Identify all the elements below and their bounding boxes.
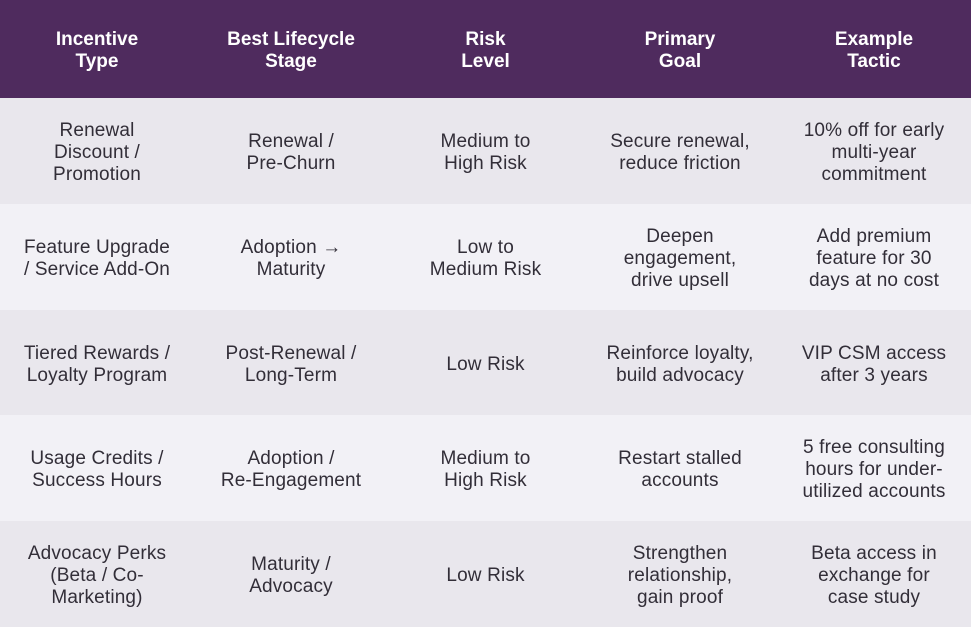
example tactic: Add premium <box>817 226 931 247</box>
lifecycle stage <box>246 131 336 174</box>
row: Renewal Discount <box>0 98 971 204</box>
primary goal: Deepen <box>646 226 714 247</box>
risk level: Low Risk <box>446 565 525 586</box>
example tactic: hours for under- <box>805 459 943 480</box>
incentive type: Loyalty Program <box>27 364 167 386</box>
incentive type: Feature Upgrade <box>24 237 170 258</box>
risk level <box>440 448 531 491</box>
incentive type <box>24 342 170 386</box>
example tactic <box>804 120 944 185</box>
risk level: Medium to <box>440 131 531 152</box>
primary goal: accounts <box>641 470 719 491</box>
primary goal <box>628 543 732 608</box>
lifecycle stage: Pre-Churn <box>246 153 336 174</box>
example tactic: utilized accounts <box>802 481 946 502</box>
primary goal: Reinforce loyalty, <box>606 342 754 364</box>
primary goal: build advocacy <box>616 364 744 386</box>
row: Advocacy Perks <box>0 521 971 627</box>
lifecycle stage <box>249 554 333 597</box>
risk level: High Risk <box>444 470 527 491</box>
column heading: Incentive Type: Type <box>76 51 118 72</box>
incentive type: Tiered Rewards / <box>24 342 170 364</box>
lifecycle stage <box>221 448 361 491</box>
example tactic: Beta access in <box>811 543 937 564</box>
example tactic <box>809 226 939 291</box>
lifecycle stage: Adoption / <box>247 448 335 469</box>
lifecycle stage: Maturity <box>257 259 325 280</box>
lifecycle stage: Renewal / <box>248 131 334 152</box>
incentive type: Success Hours <box>32 470 162 491</box>
risk level <box>430 237 542 280</box>
risk level: Low Risk <box>446 354 525 374</box>
header row <box>0 0 971 98</box>
lifecycle stage: Post-Renewal / <box>226 342 356 364</box>
column heading: Example Tactic: Tactic <box>847 51 901 72</box>
lifecycle stage: Advocacy <box>249 576 333 597</box>
risk level <box>440 131 531 174</box>
primary goal <box>618 448 742 491</box>
incentive type: Discount / <box>54 142 140 163</box>
primary goal: Secure renewal, <box>610 131 750 152</box>
incentive type: Advocacy Perks <box>28 543 166 564</box>
row: Usage Credits <box>0 415 971 521</box>
risk level: Low to <box>457 237 514 258</box>
example tactic: 5 free consulting <box>803 437 945 458</box>
example tactic: VIP CSM access <box>802 342 946 364</box>
primary goal: Restart stalled <box>618 448 742 469</box>
incentive type <box>53 120 141 185</box>
primary goal: gain proof <box>637 587 723 608</box>
example tactic: days at no cost <box>809 270 939 291</box>
column heading: Example Tactic: Example <box>835 29 913 50</box>
column heading: Primary Goal: Primary <box>645 29 715 50</box>
example tactic: commitment <box>822 164 926 185</box>
column heading: Risk Level <box>461 29 510 72</box>
primary goal: Strengthen <box>633 543 727 564</box>
lifecycle stage <box>240 237 341 280</box>
column heading: Best Lifecycle Stage: Stage <box>265 51 317 72</box>
risk level: High Risk <box>444 153 527 174</box>
lifecycle stage: Re-Engagement <box>221 470 361 491</box>
example tactic: multi-year <box>832 142 916 163</box>
example tactic: exchange for <box>818 565 930 586</box>
primary goal <box>610 131 750 174</box>
incentive type: Promotion <box>53 164 141 185</box>
column heading: Incentive Type <box>56 29 138 72</box>
primary goal: reduce friction <box>619 153 741 174</box>
example tactic <box>802 437 946 502</box>
primary goal: engagement, <box>624 248 736 269</box>
incentive type: / Service Add-On <box>24 259 170 280</box>
incentive type: Usage Credits / <box>30 448 164 469</box>
column heading: Best Lifecycle Stage <box>227 29 355 72</box>
row: Feature Upgrade <box>0 204 971 310</box>
incentive type: Marketing) <box>51 587 143 608</box>
lifecycle stage: Adoption → <box>241 237 341 258</box>
example tactic: after 3 years <box>820 364 928 386</box>
primary goal <box>606 342 754 386</box>
incentive type <box>30 448 164 491</box>
column heading: Risk Level: Level <box>461 51 510 72</box>
incentive type: Renewal <box>60 120 134 141</box>
example tactic: 10% off for early <box>804 120 944 141</box>
primary goal: drive upsell <box>631 270 729 291</box>
example tactic <box>802 342 946 386</box>
primary goal <box>624 226 736 291</box>
lifecycle stage: Maturity / <box>251 554 331 575</box>
row: Tiered Rewards <box>0 310 971 415</box>
example tactic: feature for 30 <box>816 248 932 269</box>
risk level: Medium to <box>440 448 531 469</box>
example tactic <box>811 543 937 608</box>
risk level: Medium Risk <box>430 259 541 280</box>
column heading: Primary Goal <box>645 29 716 72</box>
incentive type <box>24 237 170 280</box>
column heading: Primary Goal: Goal <box>659 51 701 72</box>
incentive type <box>28 543 166 608</box>
lifecycle stage <box>226 342 356 386</box>
lifecycle stage: Long-Term <box>245 364 337 386</box>
incentive type: (Beta / Co- <box>50 565 144 586</box>
column heading: Best Lifecycle Stage: Best Lifecycle <box>227 29 355 50</box>
column heading: Example Tactic <box>835 29 913 72</box>
column heading: Incentive Type: Incentive <box>56 29 138 50</box>
example tactic: case study <box>828 587 920 608</box>
primary goal: relationship, <box>628 565 732 586</box>
column heading: Risk Level: Risk <box>465 29 506 50</box>
